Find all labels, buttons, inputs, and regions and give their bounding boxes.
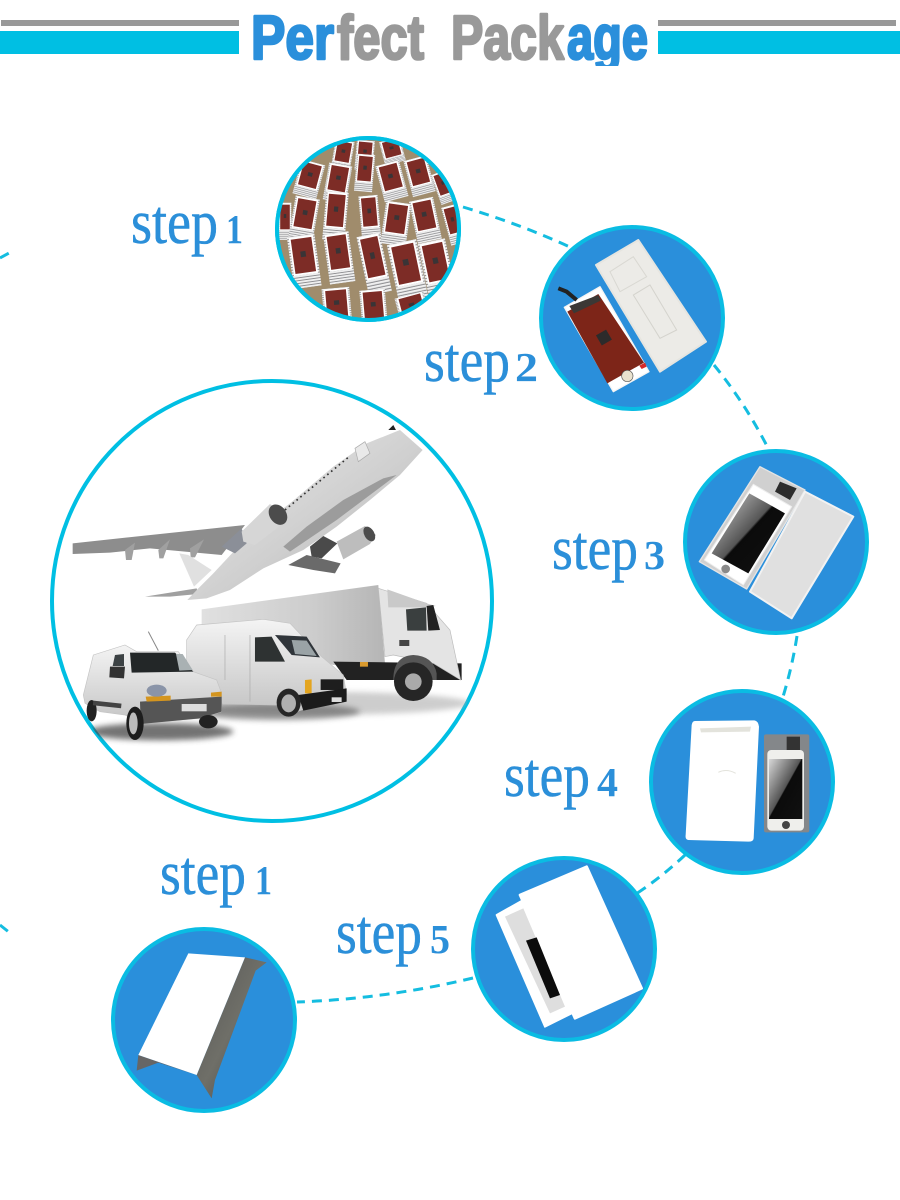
label: step 3: 3 xyxy=(644,532,665,578)
step 5: white sleeve sliding over tray xyxy=(473,858,655,1040)
title: Perfect Package xyxy=(253,12,648,66)
label: step 1: 1 xyxy=(226,206,243,252)
label: step 4: 4 xyxy=(597,759,618,805)
right header bars xyxy=(658,20,900,54)
label: step 5: 5 xyxy=(430,916,450,962)
step 1: stacks of LCD screens xyxy=(277,137,467,332)
title: Perfect Package: Per xyxy=(251,4,334,73)
step 4: white box and boxed screen xyxy=(651,691,833,873)
title: Perfect Package: Pack xyxy=(451,4,564,73)
step 2: screen and white tray xyxy=(541,227,723,409)
step 3: screen in open case xyxy=(685,451,867,633)
label: step 5: step xyxy=(336,899,422,967)
van xyxy=(187,619,347,717)
title: Perfect Package: fect xyxy=(337,4,424,73)
label: step 2: 2 xyxy=(515,344,538,390)
title: Perfect Package: age xyxy=(567,4,648,73)
airplane xyxy=(73,425,423,600)
truck xyxy=(202,585,462,701)
label: bottom step 1: step xyxy=(160,840,246,908)
label: step 1: step xyxy=(131,189,218,257)
small white car xyxy=(83,632,222,740)
label: bottom step 1: 1 xyxy=(255,857,272,903)
central transport photo circle xyxy=(52,381,492,821)
label: step 2: step xyxy=(424,327,510,395)
left header bars xyxy=(0,20,239,54)
dashed connector path xyxy=(0,207,797,1002)
truck, van and car xyxy=(83,585,470,740)
label: step 3: step xyxy=(552,515,638,583)
header banner xyxy=(0,12,900,66)
step 6: white sleeve with dark flaps xyxy=(113,929,295,1111)
label: step 4: step xyxy=(504,742,590,810)
